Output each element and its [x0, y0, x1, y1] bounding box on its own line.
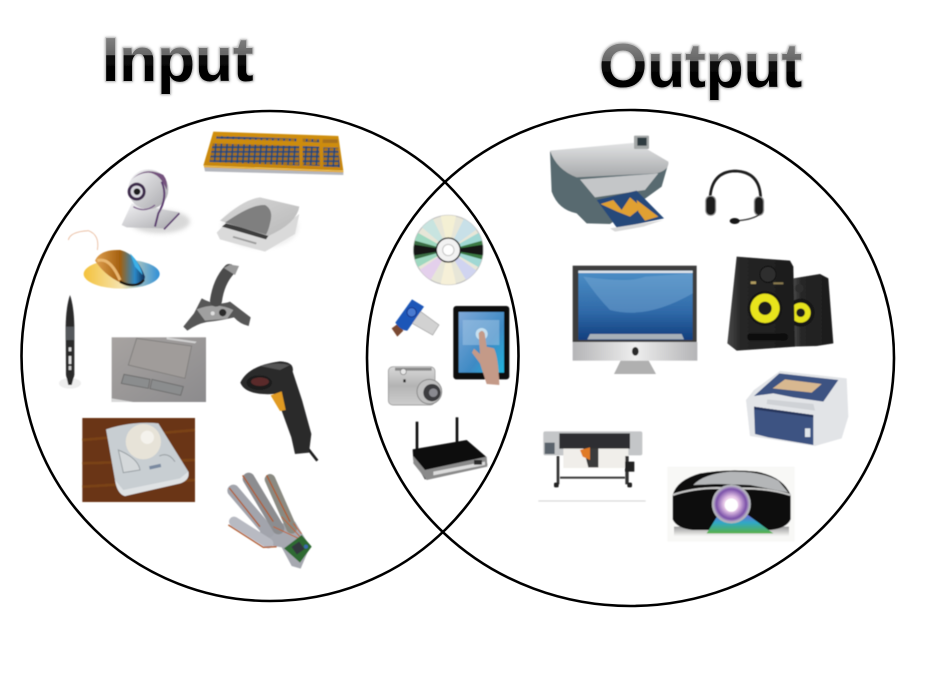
icon: touchpad — [112, 337, 206, 402]
icon: digital pen — [59, 295, 81, 389]
icon: multifunction printer — [550, 136, 668, 232]
circle: input set — [22, 111, 518, 601]
circle: output set — [367, 110, 894, 606]
icon: headset — [706, 171, 764, 224]
heading: Output: Output — [599, 32, 802, 101]
panel: input devices — [59, 132, 343, 569]
venn diagram infographic: input and output devices — [20, 36, 896, 608]
icon: keyboard — [203, 132, 343, 175]
icon: barcode scanner — [240, 361, 317, 461]
icon: data glove — [228, 475, 312, 569]
icon: tablet with hand — [453, 306, 509, 385]
icon: studio speakers — [727, 257, 833, 351]
icon: flatbed scanner — [217, 197, 299, 252]
icon: video projector — [667, 467, 795, 542]
panel: output devices — [538, 136, 848, 542]
heading: Input: Input — [102, 26, 254, 95]
icon: wireless router — [413, 417, 487, 480]
icon: CD disc — [410, 213, 487, 287]
icon: digital camera — [388, 367, 442, 405]
icon: USB flash drive — [392, 299, 439, 337]
icon: joystick — [183, 265, 251, 331]
icon: trackball — [82, 418, 195, 502]
icon: iMac monitor — [573, 266, 697, 374]
icon: large-format plotter — [538, 431, 646, 502]
icon: computer mouse — [68, 231, 160, 289]
icon: webcam — [122, 169, 190, 233]
icon: colour laser printer — [746, 371, 848, 446]
panel: input and output devices — [388, 213, 509, 480]
